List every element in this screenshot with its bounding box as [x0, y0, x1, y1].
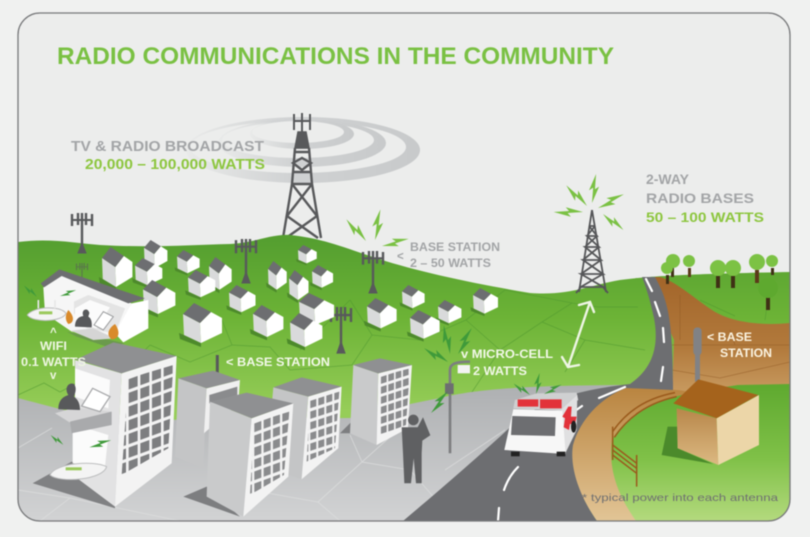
upper field lines	[672, 328, 789, 378]
label: 2-way radio bases: RADIO BASES	[646, 190, 754, 206]
label: wifi 0.1 watts	[21, 327, 86, 382]
micro-cell signal bolts	[424, 326, 472, 413]
label: farm base station: STATION	[720, 348, 772, 360]
farmhouse	[662, 379, 759, 465]
hillside grass	[18, 235, 790, 521]
label: TV and radio broadcast: 20,000 – 100,000 WATTS	[85, 157, 265, 173]
broadcast signal waves	[186, 117, 420, 183]
label: TV and radio broadcast	[71, 139, 265, 173]
footnote: * typical power into each antenna	[582, 492, 778, 504]
cell towers	[72, 213, 383, 353]
label: micro-cell 2 watts	[461, 349, 553, 378]
micro-cell street pole	[445, 362, 470, 453]
hexagon ground lines	[18, 300, 766, 395]
title: RADIO COMMUNICATIONS IN THE COMMUNITY	[57, 43, 614, 70]
farm field yard	[592, 383, 790, 521]
cutaway home with wifi	[22, 269, 148, 347]
road	[403, 277, 673, 521]
wooden fence	[613, 393, 677, 487]
label: city base station: < BASE STATION	[226, 357, 330, 369]
ambulance signal bolts	[514, 374, 562, 395]
base station signal bolts	[346, 210, 408, 247]
coverage double arrow	[562, 302, 594, 367]
label: base station 2-50 watts: <	[397, 251, 404, 263]
2-way tower signal bolts	[553, 174, 627, 232]
ambulance	[504, 393, 578, 456]
label: base station 2-50 watts: BASE STATION	[410, 242, 500, 254]
label: farm base station: < BASE	[707, 332, 752, 344]
label: wifi 0.1 watts: WIFI	[40, 341, 67, 353]
base station pole on farm	[693, 327, 702, 382]
person on phone	[402, 415, 430, 483]
label: wifi 0.1 watts: ^	[50, 327, 57, 339]
label: wifi 0.1 watts: 0.1 WATTS	[21, 357, 86, 369]
label: 2-way radio bases	[646, 171, 764, 225]
dirt track lower	[572, 386, 692, 521]
label: micro-cell 2 watts: v MICRO-CELL	[461, 349, 553, 361]
label: farm base station	[707, 332, 772, 360]
label: base station 2-50 watts: 2 – 50 WATTS	[410, 258, 491, 270]
office building 5	[340, 358, 412, 445]
office building 2 with antenna	[176, 354, 241, 437]
paved city ground	[18, 385, 640, 521]
broadcast tower	[283, 113, 321, 238]
label: 2-way radio bases: 50 – 100 WATTS	[646, 209, 764, 225]
road lane markings	[498, 279, 664, 521]
office building 3 front	[183, 393, 293, 517]
label: 2-way radio bases: 2-WAY	[646, 171, 690, 187]
label: TV and radio broadcast: TV & RADIO BROADCAST	[71, 139, 264, 155]
dirt track upper	[646, 277, 790, 395]
village houses	[99, 240, 498, 350]
label: wifi 0.1 watts: v	[50, 370, 57, 382]
label: base station 2-50 watts	[397, 242, 500, 270]
paved ground lines	[19, 428, 505, 502]
2-way radio tower	[576, 210, 608, 293]
label: micro-cell 2 watts: 2 WATTS	[473, 366, 527, 378]
trees	[661, 254, 778, 310]
office building 4	[267, 377, 342, 479]
big office building with cutaway	[33, 342, 177, 508]
